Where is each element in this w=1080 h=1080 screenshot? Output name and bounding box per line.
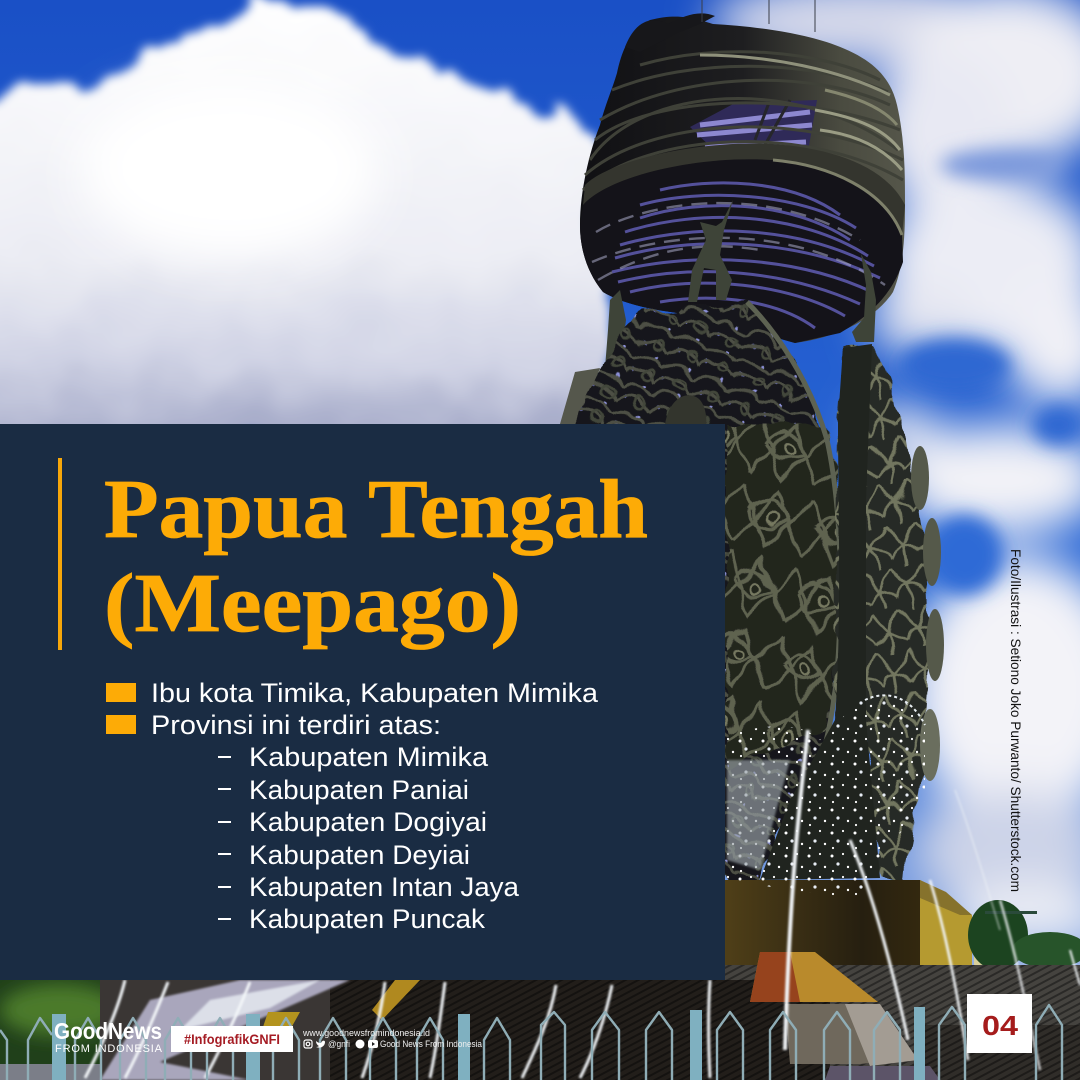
bullet: capital city: Ibu kota Timika, Kabupaten Mimika <box>151 678 599 708</box>
list of regencies: Kabupaten Deyiai <box>249 840 470 870</box>
icon: facebook <box>356 1040 364 1048</box>
hashtag label <box>171 1026 293 1052</box>
list of regencies: Kabupaten Dogiyai <box>249 807 487 837</box>
stone base block <box>725 880 984 966</box>
bird <box>625 13 715 52</box>
basket window <box>690 100 817 157</box>
icon: youtube <box>368 1040 378 1048</box>
basket interior <box>580 159 903 343</box>
icon: twitter <box>316 1041 325 1048</box>
bullet: province composition: Provinsi ini terdiri atas: <box>151 710 441 740</box>
fence poles <box>52 1007 925 1080</box>
website and social handles <box>302 1028 482 1049</box>
monument: right carved leaf <box>760 344 944 880</box>
page number: 04 <box>982 1010 1018 1041</box>
panel: Papua Tengah information <box>0 424 725 980</box>
icon: instagram <box>304 1040 312 1048</box>
fence <box>0 1005 1062 1080</box>
pyramid <box>750 952 878 1002</box>
website and social handles: Good News From Indonesia <box>380 1039 482 1049</box>
title <box>104 463 648 650</box>
hashtag label: #InfografikGNFI <box>184 1031 280 1047</box>
list of regencies: Kabupaten Intan Jaya <box>249 872 520 902</box>
list of regencies: Kabupaten Paniai <box>249 775 469 805</box>
page number <box>967 994 1032 1053</box>
website and social handles: @gnfi <box>328 1039 350 1049</box>
list of regencies: Kabupaten Puncak <box>249 904 486 934</box>
list of regencies <box>218 742 520 934</box>
list of regencies: Kabupaten Mimika <box>249 742 489 772</box>
fountain ground and slate wall <box>0 952 1080 1080</box>
title: Papua Tengah <box>104 463 648 556</box>
photo credit: Foto/Ilustrasi : Setiono Joko Purwanto/ Shutterstock.com <box>1008 549 1024 892</box>
figures holding the basket <box>605 200 876 370</box>
basket coils <box>583 52 903 190</box>
panel background <box>0 424 725 980</box>
logo: GoodNews from Indonesia: GoodNews <box>54 1018 162 1044</box>
logo: GoodNews from Indonesia <box>54 1018 163 1055</box>
website and social handles: www.goodnewsfromindonesia.id <box>302 1028 430 1038</box>
logo: GoodNews from Indonesia: FROM INDONESIA <box>55 1043 163 1055</box>
monument: woven basket <box>580 0 905 343</box>
monument: left carved disc <box>560 302 840 880</box>
trees right <box>968 900 1080 970</box>
accent bar <box>58 458 62 650</box>
water spray <box>85 695 1080 1078</box>
cables <box>702 0 815 32</box>
title: (Meepago) <box>104 557 521 650</box>
